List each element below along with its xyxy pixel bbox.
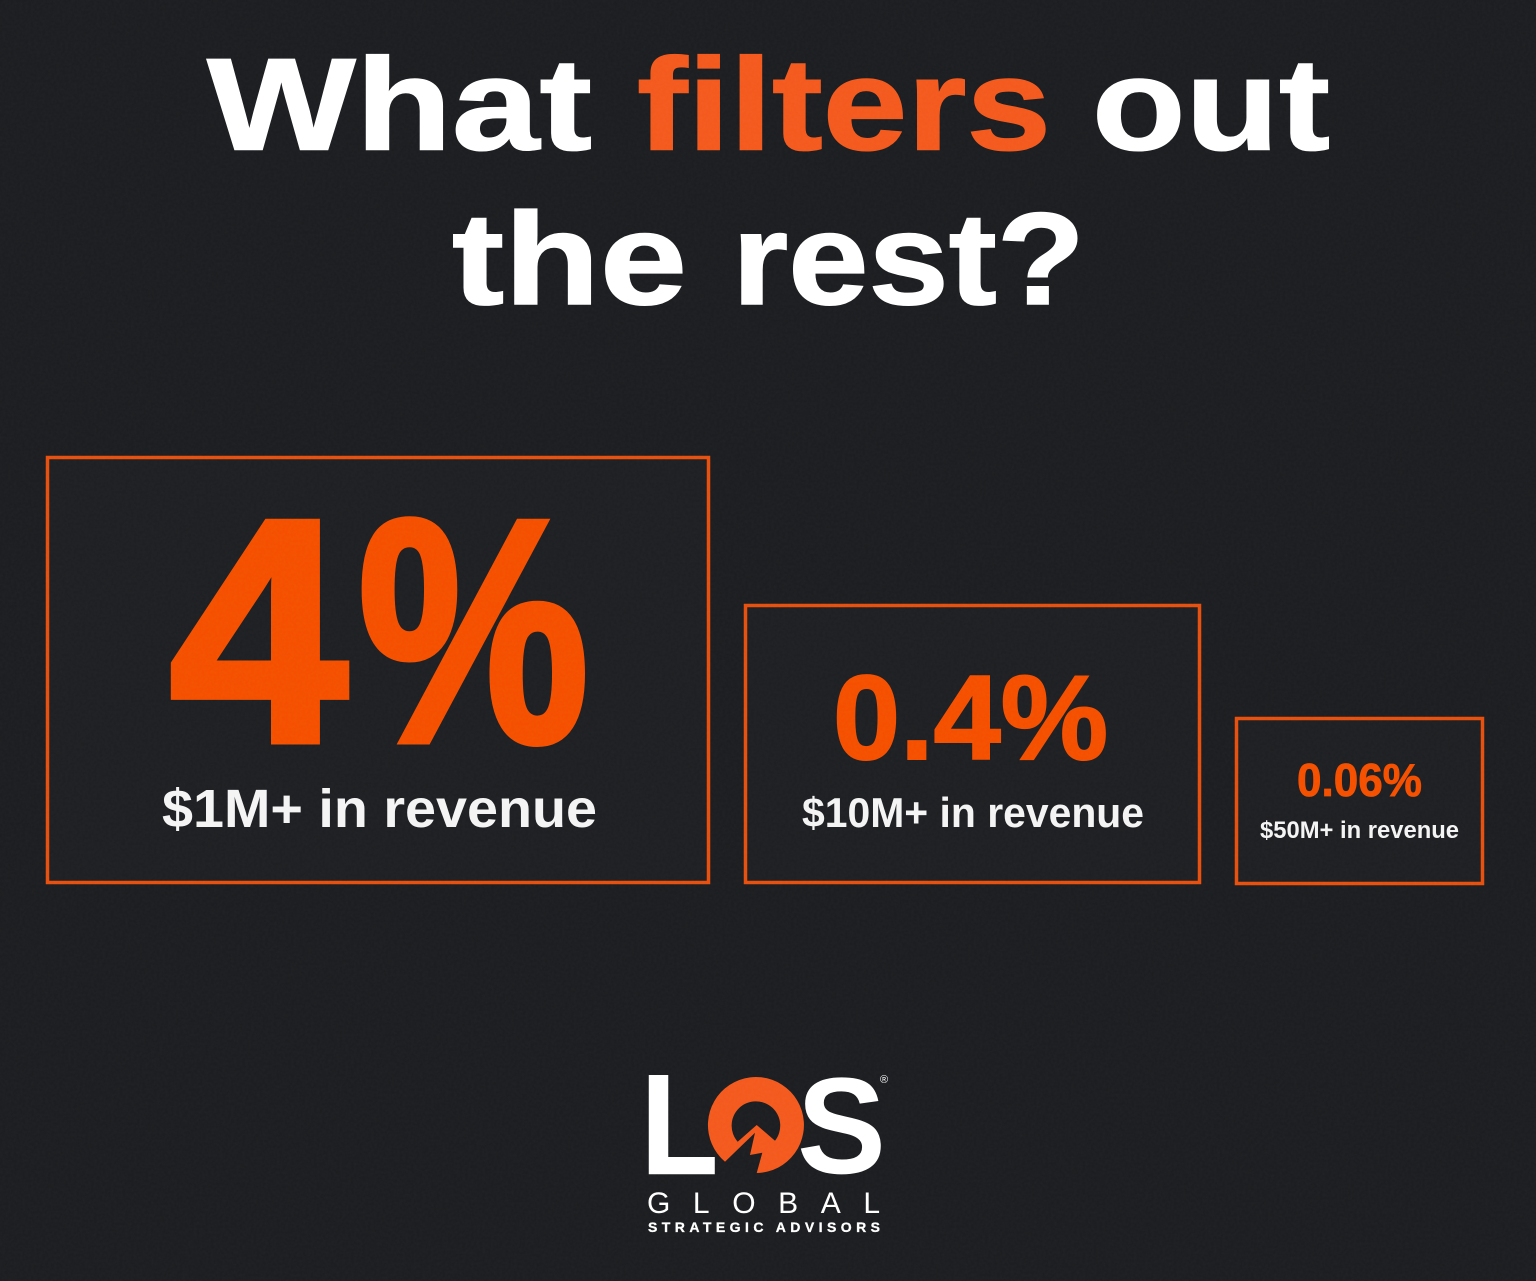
logo letter L: L <box>641 1046 718 1204</box>
stat: 4% <box>170 454 589 809</box>
panel: 0.4% at $10M+ <box>746 606 1200 882</box>
panel: 4% at $1M+ <box>48 454 708 882</box>
title: rest? <box>732 185 1085 332</box>
tagline: STRATEGIC ADVISORS: STRATEGIC ADVISORS <box>648 1219 880 1235</box>
title: the <box>452 185 687 332</box>
stat: 4%: % <box>358 454 589 809</box>
label: $50M+ in revenue: $50M+ in revenue <box>1260 817 1459 844</box>
registered mark: ® <box>880 1074 888 1086</box>
label: $10M+ in revenue: $10M+ in revenue <box>802 789 1144 836</box>
title: filters <box>637 30 1051 178</box>
logo: LOS Global Strategic Advisors <box>641 1046 888 1235</box>
stat: 4%: 4 <box>170 454 350 809</box>
label: $1M+ in revenue: $1M+ in revenue <box>162 779 597 839</box>
stat: 0.4%: 0.4% <box>833 651 1108 785</box>
logo letter S: S <box>797 1050 886 1203</box>
title <box>207 30 1330 332</box>
wordmark: GLOBAL: GLOBAL <box>647 1187 880 1220</box>
title: out <box>1092 30 1330 178</box>
stat: 0.06%: 0.06% <box>1297 754 1422 806</box>
panel: 0.06% at $50M+ <box>1236 718 1482 884</box>
title: What <box>207 30 592 178</box>
icon: orange O with arrow peak <box>708 1077 804 1173</box>
